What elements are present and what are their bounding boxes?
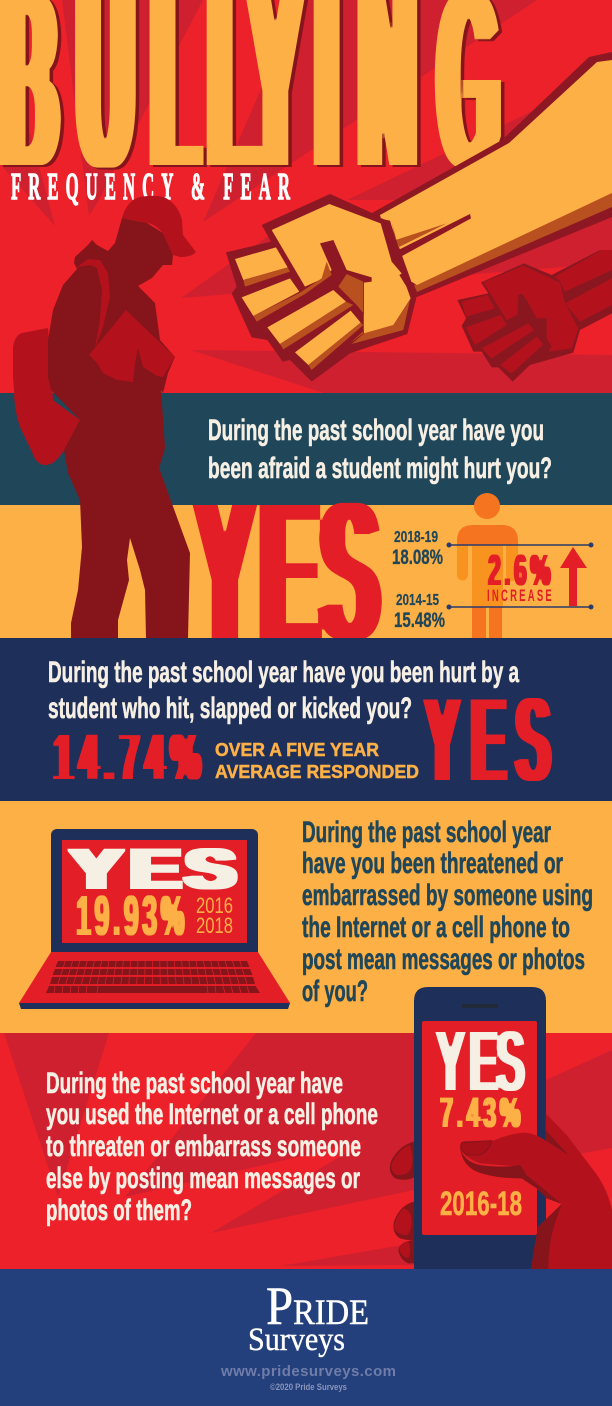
caption: five year average (215, 740, 419, 782)
phone YES: YES (436, 1013, 525, 1110)
laptop screen YES: YES (71, 839, 236, 901)
question 3 text: of you? (302, 975, 368, 1008)
stats: 2018-19 and 2014-15 values: 2014-15 (396, 592, 439, 609)
stats: 2018-19 and 2014-15 values: 15.48% (394, 609, 445, 632)
footer copyright: ©2020 Pride Surveys (270, 1382, 347, 1392)
question 4 text (46, 1067, 378, 1227)
laptop years: 2016 (196, 893, 233, 918)
question 3 text (302, 816, 593, 1008)
stats: 2018-19 and 2014-15 values (392, 529, 445, 632)
panel: red phone band (0, 1033, 612, 1269)
panel: yellow laptop band (0, 801, 612, 1033)
panel: footer (0, 1269, 612, 1406)
icon: smartphone (414, 987, 546, 1269)
logo: Pride Surveys: PRIDE (266, 1276, 369, 1336)
question 4 text: to threaten or embarrass someone (46, 1130, 361, 1163)
illustration: hand over phone (460, 1113, 612, 1270)
big YES for question 1: YES (196, 458, 378, 686)
question 4 text: During the past school year have (46, 1067, 343, 1100)
caption: five year average: OVER A FIVE YEAR (215, 740, 379, 760)
footer URL: www.pridesurveys.com (220, 1363, 396, 1380)
illustration: yellow arm and fist (226, 52, 612, 382)
logo: Pride Surveys (248, 1276, 369, 1358)
big YES for question 2: YES (425, 671, 550, 808)
icon: laptop (19, 829, 290, 1009)
panel: red header background (0, 0, 612, 393)
stats: 2018-19 and 2014-15 values: 18.08% (392, 546, 443, 569)
question 2 text: student who hit, slapped or kicked you? (48, 692, 412, 725)
panel: teal question band (0, 393, 612, 505)
question 4 text: you used the Internet or a cell phone (46, 1098, 378, 1131)
caption: five year average: AVERAGE RESPONDED (215, 762, 419, 782)
stat: 2.6 percent increase: INCREASE (487, 586, 554, 605)
arrow: upward increase (560, 547, 587, 606)
panel: navy question band (0, 638, 612, 801)
question 4 text: else by posting mean messages or (46, 1162, 360, 1195)
stat: 2.6 percent increase (487, 546, 554, 605)
laptop years: 2018 (196, 913, 233, 938)
laptop years (196, 893, 233, 938)
stat: 2.6 percent increase: 2.6% (488, 546, 554, 595)
question 4 text: photos of them? (46, 1194, 192, 1227)
logo: Pride Surveys: Surveys (248, 1322, 345, 1358)
phone stat: 7.43 percent: 7.43% (440, 1089, 524, 1137)
illustration: fingers behind phone (390, 1142, 414, 1263)
text: 19.93% (76, 884, 188, 948)
illustration: dark red second fist (457, 250, 612, 382)
panel: yellow statistics band (0, 505, 612, 638)
question 2 text (48, 656, 519, 725)
phone years: 2016-18 (440, 1185, 522, 1223)
stats: 2018-19 and 2014-15 values: 2018-19 (394, 529, 438, 546)
text: 14.74% (54, 718, 207, 796)
chart: person pictogram with comparison lines (446, 493, 594, 638)
question 1 text (208, 414, 552, 485)
illustration: student silhouette (13, 196, 196, 638)
